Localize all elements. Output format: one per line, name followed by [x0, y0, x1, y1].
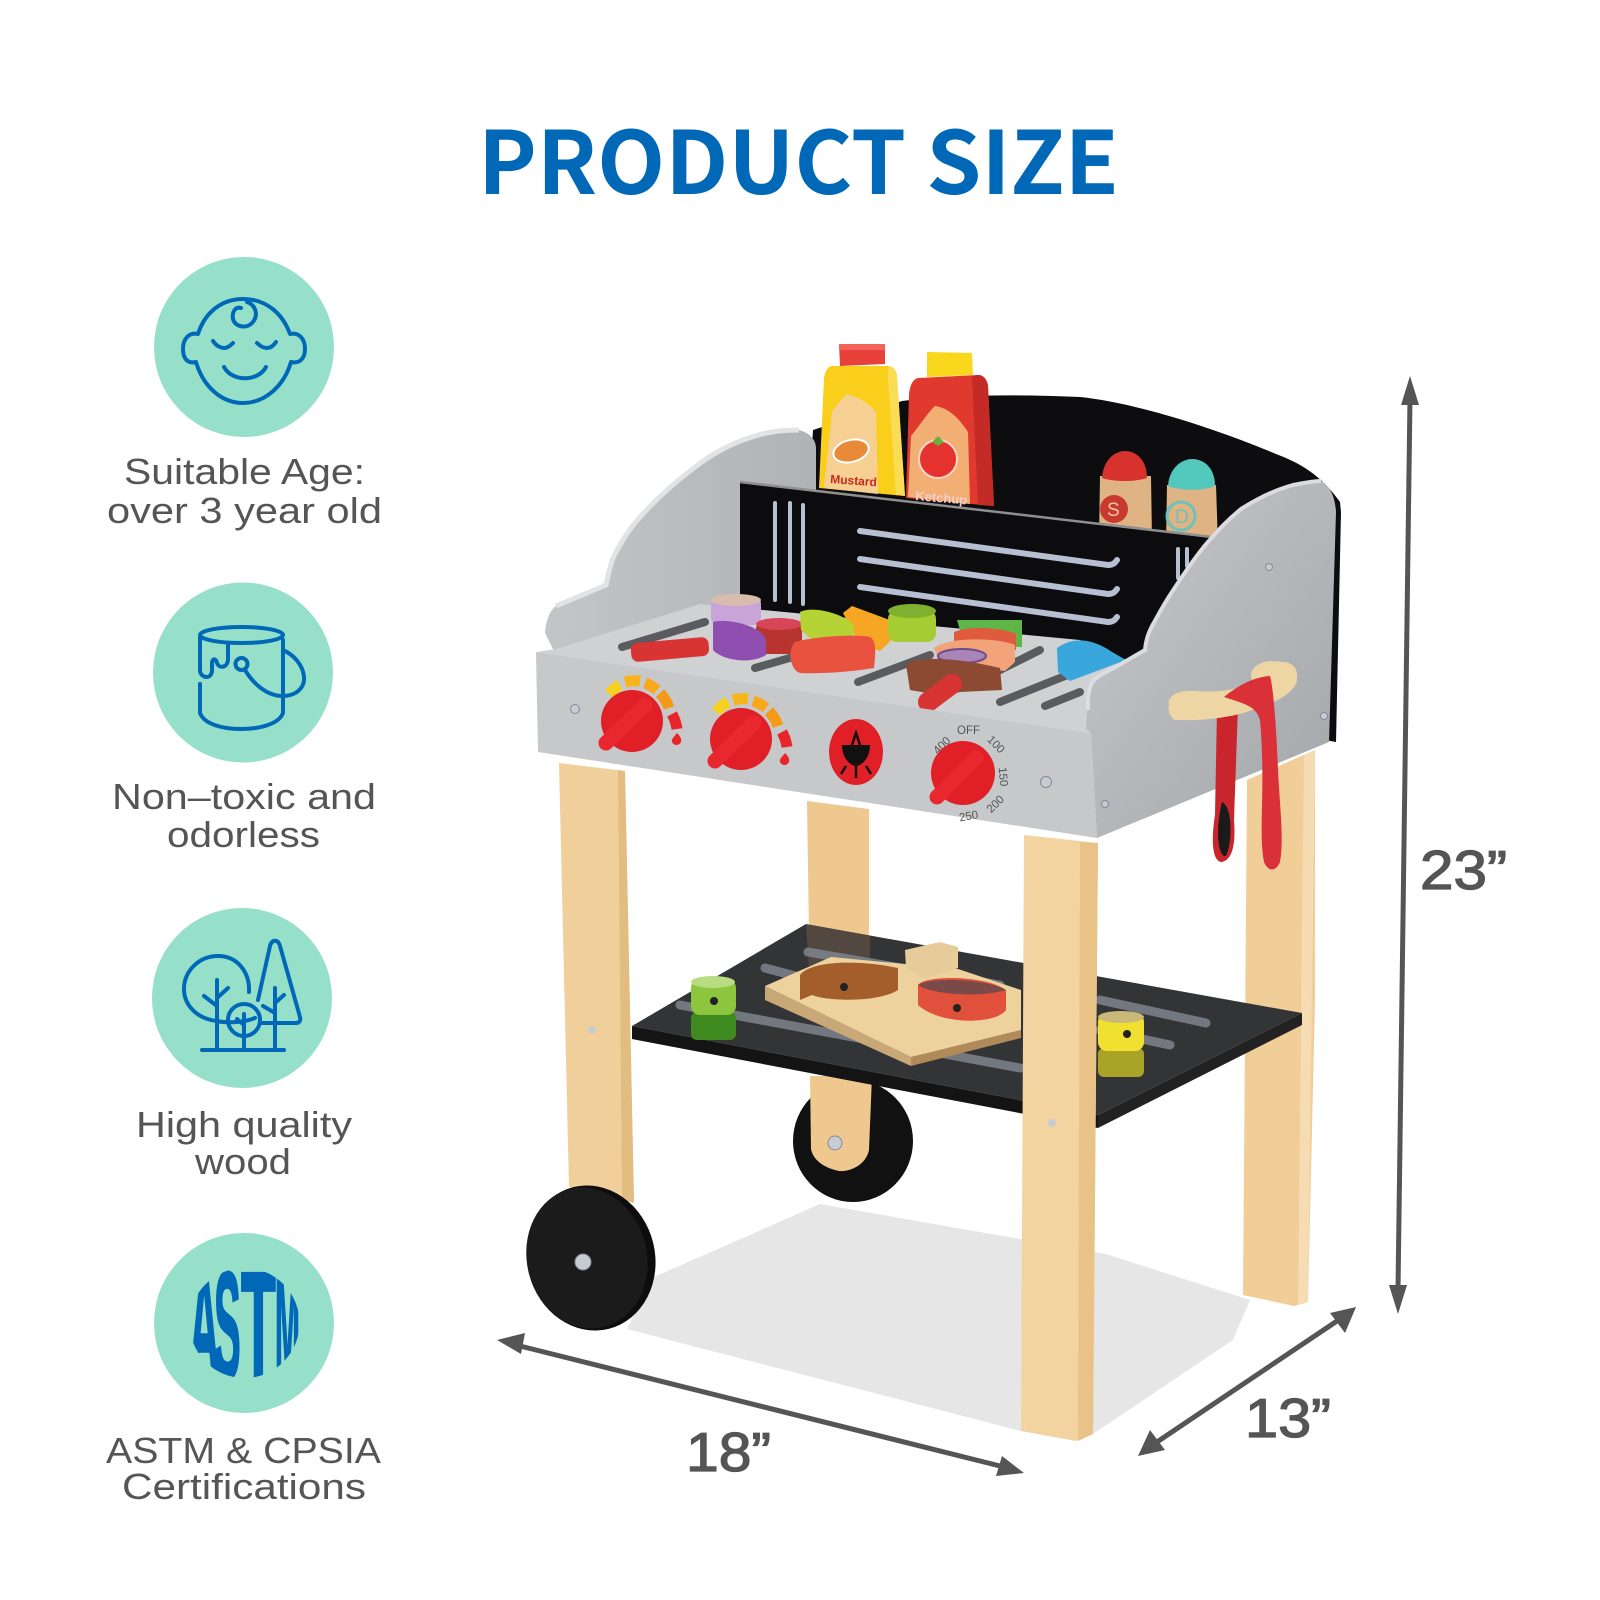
icon: ASTM logo: [154, 1233, 334, 1413]
caption: certifications: [106, 1430, 381, 1507]
left side panel: [545, 430, 816, 655]
feature: certifications: [106, 1233, 381, 1507]
temperature dial: 250: [958, 809, 979, 824]
back right leg: [1243, 750, 1315, 1306]
wooden hook: [1169, 661, 1297, 720]
knob: left: [601, 690, 663, 752]
icon: ASTM logo: T: [241, 1242, 276, 1411]
right side panel: [1086, 481, 1336, 838]
dimension arrow: depth: [1138, 1307, 1356, 1456]
temperature dial: 400: [931, 735, 953, 757]
screws: [570, 564, 1328, 808]
tongs (front arm): [1224, 676, 1282, 870]
food: purple slice: [938, 649, 986, 663]
ketchup bottle: [906, 352, 994, 508]
product illustration: toy grill: [511, 344, 1341, 1441]
temperature dial: 150: [996, 767, 1009, 787]
icon: paint bucket: [153, 582, 333, 762]
icon: ASTM logo: A: [189, 1240, 219, 1411]
icon: baby face: [154, 257, 334, 437]
label: depth: 13”: [1245, 1387, 1331, 1449]
food: blue: [1057, 640, 1126, 681]
caption: wood: High quality: [136, 1104, 352, 1145]
skewer food: light purple: [711, 594, 761, 625]
icon: trees: [152, 908, 332, 1088]
condiment: pepper shaker: D: [1175, 507, 1189, 528]
condiment: salt shaker: [1099, 451, 1152, 540]
lower shelf: [632, 924, 1302, 1128]
food: brown steak: [906, 659, 1002, 696]
tongs (back arm): [1213, 706, 1238, 862]
skewer handle: [630, 637, 710, 662]
ketchup bottle: Ketchup: [915, 488, 968, 508]
grill table top: [536, 604, 1130, 733]
flame icon: middle: [780, 753, 789, 765]
caption: non-toxic: Non–toxic and: [112, 776, 376, 817]
label: height: 23”: [1420, 839, 1507, 901]
dimension arrow: width: [497, 1333, 1024, 1476]
caption: non-toxic: odorless: [167, 814, 320, 855]
mustard bottle: Mustard: [830, 472, 877, 489]
food: orange: [843, 606, 897, 651]
grill badge: [829, 719, 883, 785]
temperature dial: 200: [985, 794, 1007, 816]
red stick: [928, 684, 952, 702]
food: green slab: [957, 620, 1022, 647]
feature: wood: [136, 908, 352, 1182]
grill front panel: [536, 652, 1097, 838]
icon: ASTM logo: S: [214, 1240, 241, 1411]
caption: certifications: Certifications: [122, 1466, 366, 1507]
knob: middle: [710, 708, 772, 770]
title: PRODUCT SIZE: [478, 94, 1119, 220]
flame icon: left: [672, 733, 681, 745]
gauge: middle burner: [716, 699, 787, 747]
condiment: pepper shaker: [1166, 459, 1218, 545]
gauge: left burner: [609, 681, 677, 729]
food: red slab: [790, 636, 875, 673]
knob: temperature: [931, 741, 995, 805]
icon: ASTM logo: M: [275, 1242, 300, 1411]
label: width: 18”: [686, 1421, 771, 1483]
front left wheel: [511, 1172, 671, 1344]
food: salmon: [934, 639, 1015, 671]
temperature dial: 100: [985, 734, 1007, 756]
caption: suitable age: [107, 451, 382, 531]
food: green round: [888, 604, 936, 642]
caption: wood: wood: [194, 1141, 291, 1182]
mustard bottle: [819, 344, 905, 496]
caption: non-toxic: [112, 776, 376, 855]
dimension arrow: height: [1389, 376, 1419, 1314]
caption: certifications: ASTM & CPSIA: [106, 1430, 381, 1471]
skewer food: dark red: [756, 618, 802, 654]
grilling food: [630, 594, 1126, 702]
back panel: [800, 395, 1341, 742]
inner black panel with vents: [740, 482, 1212, 650]
skewer food: purple: [713, 621, 766, 660]
temperature dial: OFF: [957, 725, 980, 737]
food: green corn: [800, 610, 854, 640]
feature: non-toxic: [112, 582, 376, 855]
food on shelf: [691, 942, 1144, 1077]
control knobs: [570, 564, 1328, 824]
tongs tip: [1218, 802, 1231, 856]
condiment: salt shaker: S: [1107, 500, 1120, 521]
front left leg: [559, 763, 634, 1203]
feature: suitable age: [107, 257, 382, 531]
caption: wood: [136, 1104, 352, 1182]
caption: suitable age: over 3 year old: [107, 490, 382, 531]
caption: suitable age: Suitable Age:: [124, 451, 365, 492]
floor shadow: [627, 1204, 1250, 1434]
front right leg: [1021, 835, 1098, 1441]
temperature dial: [931, 725, 1009, 824]
back left leg: [807, 801, 869, 1000]
food: red steak: [954, 628, 1016, 650]
back wheel: [793, 1076, 913, 1202]
